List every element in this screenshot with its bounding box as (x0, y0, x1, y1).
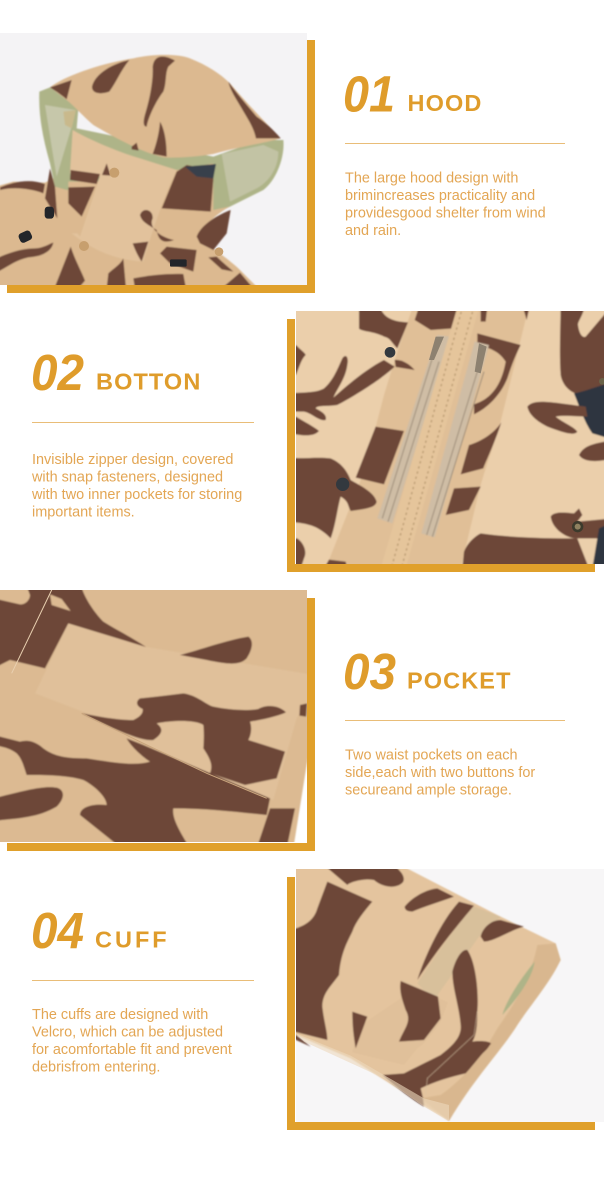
description pocket: Two waist pockets on each (345, 748, 518, 764)
text block: pocket (343, 643, 565, 798)
photo: sleeve cuff (287, 862, 604, 1122)
photo frame: button (287, 319, 595, 572)
text block: cuff (31, 902, 254, 1076)
description cuff: debrisfrom entering. (32, 1060, 160, 1076)
panel: pocket section (0, 582, 315, 851)
heading POCKET: POCKET (407, 668, 512, 694)
description pocket: secureand ample storage. (345, 782, 512, 798)
description hood: and rain. (345, 223, 401, 239)
description hood: providesgood shelter from wind (345, 205, 546, 221)
panel: cuff section (287, 862, 604, 1130)
number 04: 04 (31, 902, 84, 959)
description button: important items. (32, 504, 135, 520)
heading HOOD: HOOD (408, 90, 482, 116)
photo frame: pocket (7, 598, 315, 851)
panel: hood section (0, 33, 315, 293)
number 03: 03 (343, 643, 396, 700)
description pocket: side,each with two buttons for (345, 765, 535, 781)
description button: with snap fasteners, designed (31, 470, 223, 486)
photo: jacket hood (0, 33, 307, 292)
heading BOTTON: BOTTON (96, 368, 201, 394)
heading CUFF: CUFF (95, 926, 170, 952)
description hood: brimincreases practicality and (345, 188, 535, 204)
panel: button section (287, 302, 604, 572)
description button: with two inner pockets for storing (31, 487, 242, 503)
icon: snap buttons (336, 337, 604, 532)
photo: waist pocket (0, 582, 315, 848)
description hood: The large hood design with (345, 171, 518, 187)
description cuff: Velcro, which can be adjusted (32, 1024, 223, 1040)
photo frame: cuff (287, 877, 595, 1130)
text block: hood (343, 66, 565, 239)
icon: snap buttons and cord toggles (17, 168, 223, 267)
text block: button (31, 344, 254, 520)
photo frame: hood (7, 40, 315, 293)
description cuff: for acomfortable fit and prevent (32, 1042, 232, 1058)
number 01: 01 (343, 66, 395, 122)
photo: zipper and snap buttons (287, 302, 604, 572)
description button: Invisible zipper design, covered (32, 452, 233, 468)
number 02: 02 (31, 344, 84, 401)
description cuff: The cuffs are designed with (32, 1007, 208, 1023)
